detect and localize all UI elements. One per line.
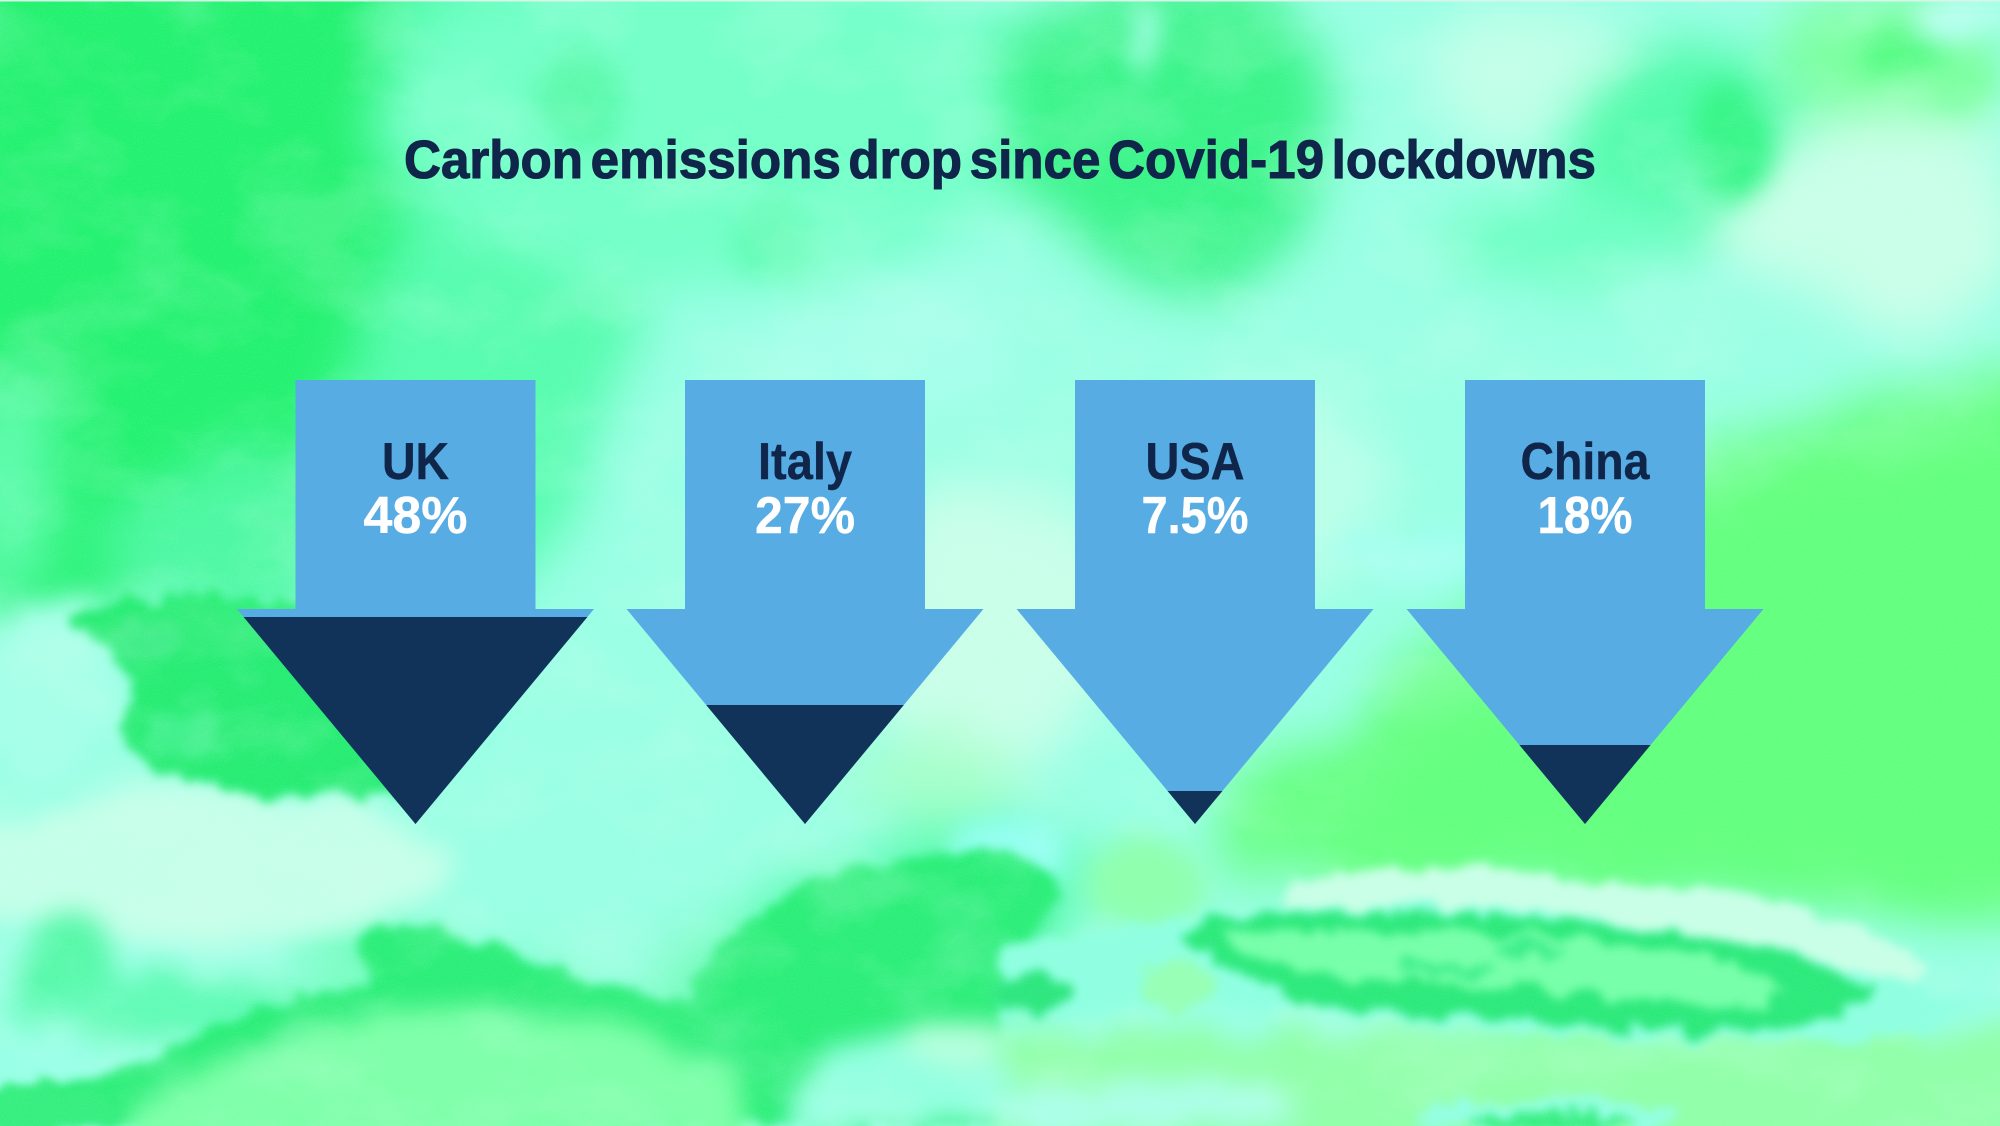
- drop fill: [244, 617, 587, 824]
- drop fill: [706, 705, 904, 824]
- country label: Italy: [758, 433, 852, 491]
- country label: USA: [1146, 433, 1244, 491]
- arrow: China 18%: [1406, 380, 1764, 824]
- percentage: 27%: [755, 487, 855, 545]
- arrow: UK 48%: [237, 380, 594, 824]
- arrow: Italy 27%: [626, 380, 984, 824]
- title: Carbon emissions drop since Covid-19 lockdowns: [404, 130, 1596, 190]
- drop fill: [1168, 791, 1222, 824]
- percentage: 7.5%: [1142, 487, 1248, 545]
- arrow body: [1016, 380, 1374, 824]
- country label: China: [1520, 433, 1650, 491]
- country label: UK: [382, 433, 449, 491]
- percentage: 18%: [1538, 487, 1632, 545]
- arrow body: [626, 380, 984, 824]
- drop fill: [1519, 745, 1651, 824]
- arrow body: [237, 380, 594, 824]
- arrow: USA 7.5%: [1016, 380, 1374, 824]
- arrow body: [1406, 380, 1764, 824]
- percentage: 48%: [364, 487, 468, 545]
